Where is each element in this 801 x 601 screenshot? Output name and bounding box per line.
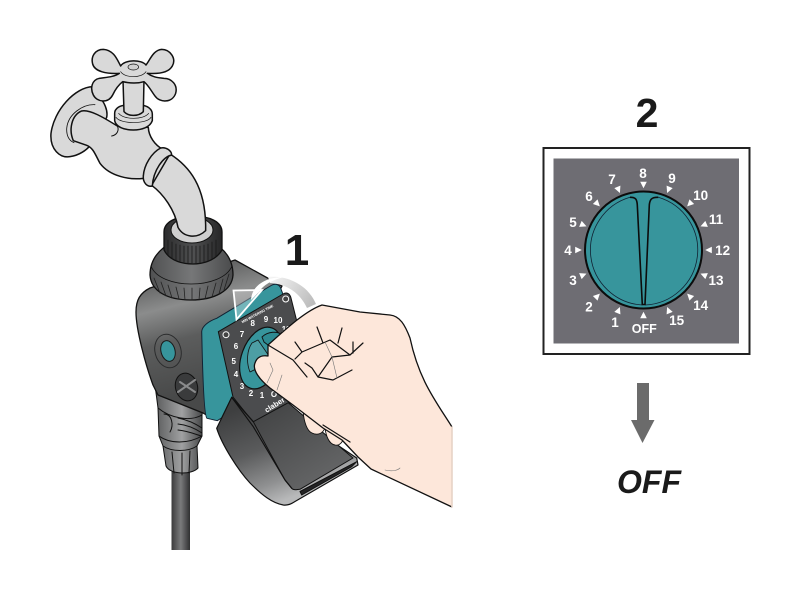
cover grip slot xyxy=(300,462,357,495)
hand fine skin lines xyxy=(267,342,400,471)
dial numbers: 13 xyxy=(708,273,724,288)
dial numbers xyxy=(564,166,730,336)
tap stem xyxy=(123,80,144,115)
hand xyxy=(254,305,452,507)
cover inner face xyxy=(253,403,353,490)
dial numbers: 1 xyxy=(611,315,619,330)
dial numbers: 10 xyxy=(693,188,708,203)
tap cross handle xyxy=(92,49,176,101)
dial numbers: 11 xyxy=(709,212,724,227)
dial detail panel xyxy=(544,148,750,354)
dial numbers: 3 xyxy=(240,382,245,391)
dial numbers: 5 xyxy=(231,357,236,366)
curled fingers under hand xyxy=(303,408,344,445)
step number 1: 1 xyxy=(285,226,309,275)
round vent xyxy=(172,371,201,403)
dial numbers: 8 xyxy=(639,166,647,181)
dial numbers: 14 xyxy=(693,298,709,313)
grey dial plate xyxy=(554,158,739,344)
dial panel xyxy=(218,293,297,422)
dial numbers: 2 xyxy=(585,300,593,314)
step number 2: 2 xyxy=(636,90,658,136)
OFF label: OFF xyxy=(617,464,682,500)
dial numbers: 4 xyxy=(234,370,239,379)
hose xyxy=(172,465,190,550)
garden tap xyxy=(51,49,206,236)
dial numbers: claber xyxy=(263,395,286,415)
teal dial knob xyxy=(232,321,290,395)
dial numbers: 3 xyxy=(569,273,577,288)
dial numbers: 5 xyxy=(569,215,577,230)
dial numbers: 7 xyxy=(240,330,245,339)
panel frame xyxy=(544,148,750,354)
water timer device xyxy=(136,216,452,550)
threaded inlet nut xyxy=(164,216,222,264)
dial numbers: O xyxy=(271,390,277,399)
dial numbers: 15 xyxy=(669,313,685,328)
dial numbers: MIN WATERING TIME xyxy=(241,304,275,324)
rotation arrow xyxy=(234,277,284,320)
dial numbers: OFF xyxy=(632,322,657,336)
dial numbers: 11 xyxy=(282,325,291,334)
dial numbers: 10 xyxy=(274,316,283,325)
cover left fold xyxy=(232,397,292,488)
down arrow xyxy=(631,383,654,443)
teal dial xyxy=(585,192,702,308)
coupling ring xyxy=(150,238,233,300)
hand right cut edge xyxy=(451,427,453,507)
tap spout pipe xyxy=(152,154,206,236)
timer body xyxy=(136,260,282,420)
panel screws xyxy=(223,296,289,338)
tap body xyxy=(71,111,172,186)
dial numbers: 9 xyxy=(264,315,269,324)
dial numbers xyxy=(231,304,291,415)
rotation arc xyxy=(268,277,316,308)
dial numbers: 7 xyxy=(608,172,616,187)
tap wall flange xyxy=(51,87,107,157)
teal faceplate frame xyxy=(202,284,300,421)
dial tick arrows xyxy=(575,182,712,318)
dial numbers: 1 xyxy=(260,391,265,400)
dial numbers: 2 xyxy=(249,389,254,398)
tap collar xyxy=(143,148,172,186)
dial numbers: 12 xyxy=(715,243,730,258)
dial numbers: 6 xyxy=(234,342,239,351)
dial numbers: 6 xyxy=(585,189,593,204)
open cover flap xyxy=(217,397,358,505)
hand finger creases xyxy=(268,327,363,442)
dial numbers: 8 xyxy=(250,319,255,328)
outlet connector xyxy=(155,385,204,475)
dial grip xyxy=(630,197,658,304)
dial numbers: 4 xyxy=(564,243,572,258)
dial inner ring xyxy=(590,197,698,305)
tap stem base xyxy=(115,105,152,130)
dial numbers: 9 xyxy=(668,171,676,186)
teal indicator button xyxy=(151,331,185,371)
